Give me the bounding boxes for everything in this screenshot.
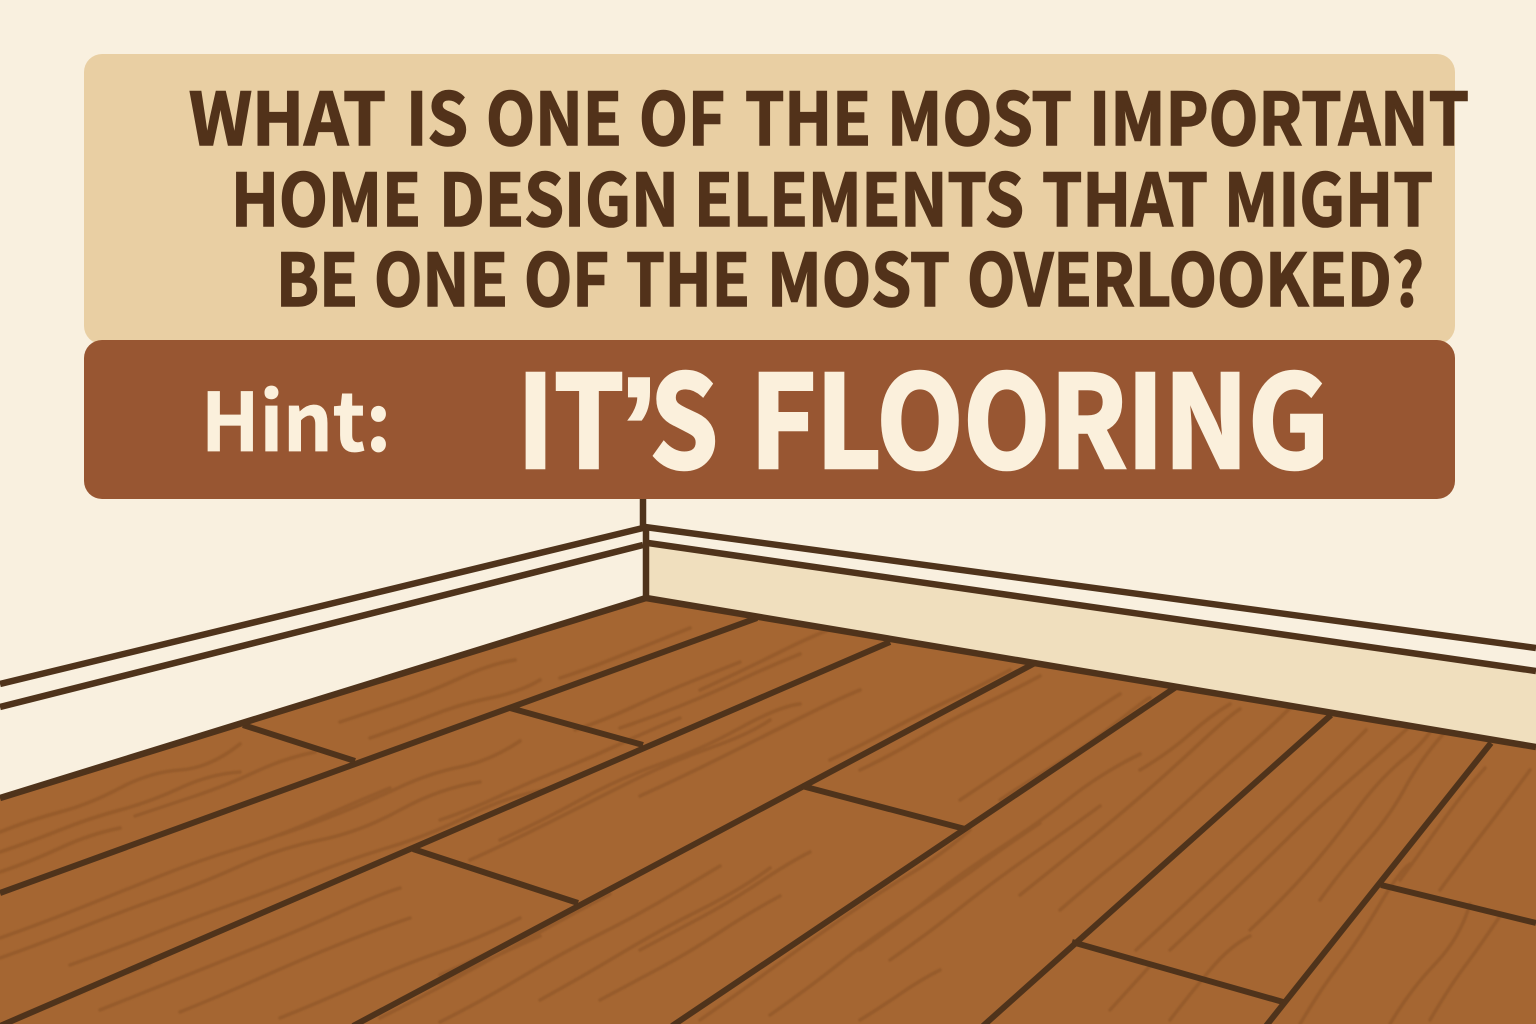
question heading: WHAT xyxy=(189,61,386,166)
hint label: Hint: xyxy=(201,359,391,475)
baseboard: right wall fill xyxy=(647,543,1536,747)
question heading: BE xyxy=(276,222,358,327)
answer text: FLOORING xyxy=(750,320,1329,504)
question heading: THE xyxy=(626,222,750,327)
question heading: OVERLOOKED? xyxy=(967,222,1424,327)
question heading: IMPORTANT xyxy=(1089,61,1469,166)
question heading: OF xyxy=(524,222,609,327)
question heading: ONE xyxy=(374,222,508,327)
question heading: MOST xyxy=(767,222,950,327)
hint banner xyxy=(84,340,1455,499)
question heading: DESIGN xyxy=(439,142,679,247)
plank lines xyxy=(0,618,1536,1024)
wood floor xyxy=(0,598,1536,1024)
wall corner line xyxy=(643,498,646,600)
question heading: IS xyxy=(406,61,468,166)
question heading: MIGHT xyxy=(1224,142,1433,247)
question panel xyxy=(84,54,1455,344)
answer text: IT xyxy=(517,320,624,504)
question heading xyxy=(189,61,1469,327)
question heading: ELEMENTS xyxy=(694,142,1024,247)
question heading: THE xyxy=(745,61,871,166)
question heading: THAT xyxy=(1042,142,1208,247)
baseboard: right wall xyxy=(645,527,1536,747)
answer text: ’ xyxy=(618,345,660,513)
question heading: OF xyxy=(639,61,725,166)
baseboard: left wall xyxy=(0,528,646,798)
wood grain xyxy=(0,626,1530,1024)
answer text: S xyxy=(650,320,718,504)
question heading: ONE xyxy=(486,61,622,166)
question heading: HOME xyxy=(231,142,421,247)
question heading: MOST xyxy=(887,61,1072,166)
